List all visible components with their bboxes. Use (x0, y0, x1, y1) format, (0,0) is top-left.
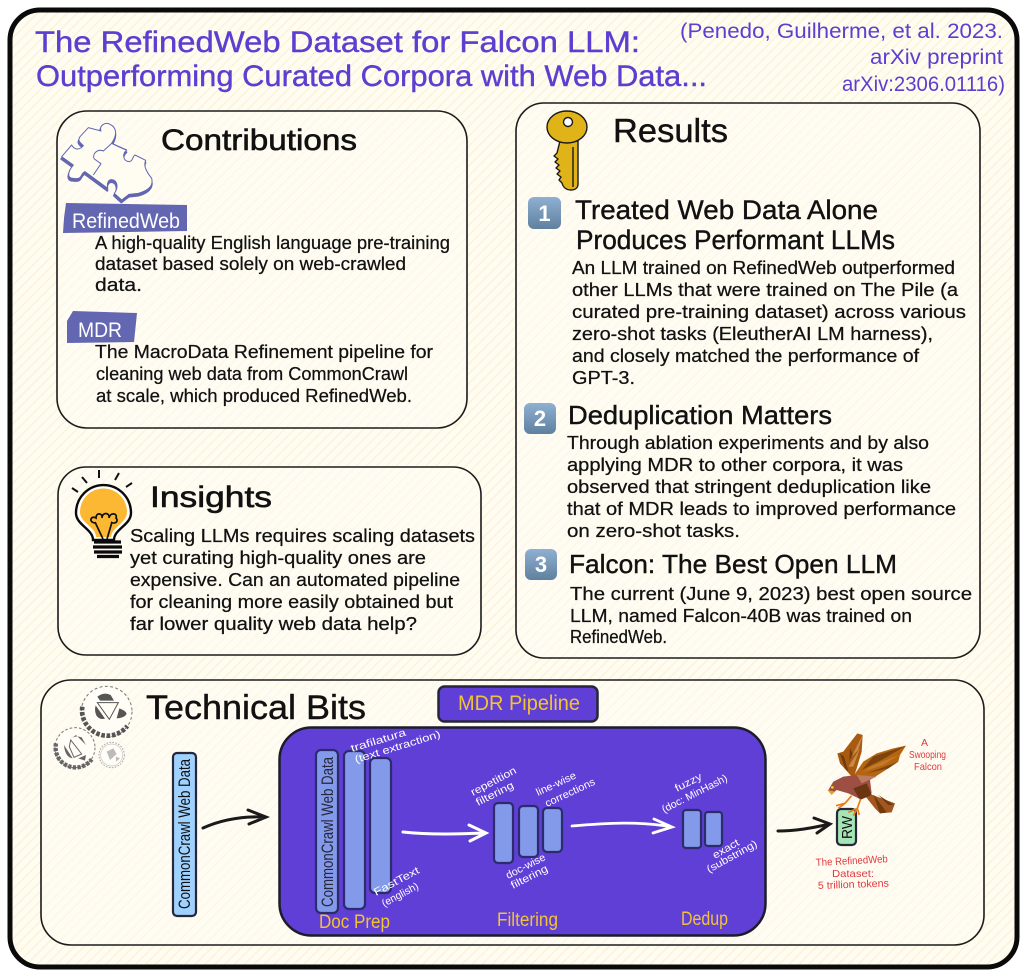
label: MDR pipeline: MDR Pipeline (458, 692, 580, 715)
badge: 1 (528, 197, 561, 229)
icon: key (547, 111, 587, 190)
text: finding 2 body: applying MDR to other corpora, it was (567, 455, 903, 475)
stage: filtering (469, 764, 597, 931)
tag: MDR: MDR (78, 319, 122, 342)
heading: finding 1: Treated Web Data Alone (575, 195, 878, 225)
panel: results (516, 103, 980, 658)
citation: arXiv preprint (870, 46, 1003, 69)
heading: technical bits: Technical Bits (146, 689, 366, 727)
panel: insights (58, 467, 481, 655)
badge: 3: 3 (535, 552, 547, 577)
icon: swooping falcon (827, 733, 906, 816)
text: finding 2 body: observed that stringent deduplication like (567, 477, 931, 497)
badge: 1: 1 (538, 201, 551, 226)
text: finding 1 body: other LLMs that were trained on The Pile (a (572, 280, 959, 300)
arrow: doc prep to filtering (403, 825, 486, 841)
text: RefinedWeb description (95, 233, 450, 295)
caption: swooping falcon: Swooping (909, 749, 946, 761)
heading: finding 1 (575, 195, 895, 255)
tag: MDR (67, 311, 137, 343)
stage: doc prep: (english) (380, 880, 421, 910)
caption: swooping falcon: A (921, 737, 928, 749)
stage: filtering: Filtering (497, 910, 558, 931)
arrow: pipeline to RefinedWeb (778, 818, 830, 833)
stage: filtering: doc-wise (504, 851, 548, 882)
arrow: filtering to dedup (572, 819, 672, 833)
text: finding 3 body: The current (June 9, 2023) best open source (570, 584, 972, 604)
panel: pipeline (280, 727, 766, 936)
text: finding 1 body: GPT-3. (572, 368, 635, 388)
stage: doc prep: CommonCrawl Web Data (318, 757, 337, 907)
title: The RefinedWeb Dataset for Falcon LLM: (35, 26, 640, 59)
label: MDR pipeline (438, 686, 598, 722)
text: finding 1 body: zero-shot tasks (EleutherAI LM harness), (572, 324, 933, 344)
caption: RefinedWeb dataset (816, 853, 889, 892)
stage: dedup: fuzzy (673, 770, 705, 795)
caption: swooping falcon (909, 737, 946, 773)
badge: 2: 2 (534, 406, 546, 431)
stage: doc prep: FastText (372, 865, 422, 899)
citation: arXiv:2306.01116) (842, 73, 1005, 96)
text: finding 2 body (567, 433, 956, 541)
text: MDR description (95, 342, 433, 406)
stage: filtering: line-wise (534, 770, 578, 799)
text: MDR description: at scale, which produced RefinedWeb. (96, 386, 412, 406)
caption: RefinedWeb dataset: Dataset: (832, 868, 874, 880)
heading: finding 2: Deduplication Matters (568, 400, 832, 430)
badge: 2 (524, 403, 556, 434)
arrow: input to pipeline (203, 810, 266, 828)
text: insights body: yet curating high-quality ones are (130, 548, 426, 568)
caption: RefinedWeb dataset: 5 trillion tokens (818, 878, 889, 892)
text: finding 2 body: that of MDR leads to improved performance (567, 499, 956, 519)
badge: 3 (525, 549, 557, 580)
box: RW dataset (837, 809, 856, 845)
text: finding 3 body (570, 584, 972, 647)
bar: CommonCrawl web data input: CommonCrawl Web Data (175, 759, 194, 909)
box: RW dataset: RW (839, 815, 856, 839)
text: RefinedWeb description: A high-quality English language pre-training (95, 233, 450, 253)
heading: insights: Insights (150, 481, 272, 514)
stage: filtering: repetition (469, 764, 519, 799)
icon: gears (55, 686, 132, 768)
citation (680, 20, 1005, 96)
stage: dedup (660, 770, 759, 930)
icon: puzzle pieces (61, 123, 152, 202)
text: finding 2 body: Through ablation experiments and by also (567, 433, 929, 453)
panel: contributions (57, 111, 467, 428)
stage: doc prep: (text extraction) (353, 728, 442, 766)
panel: technical bits (41, 680, 984, 945)
text: insights body: far lower quality web data help? (130, 614, 417, 634)
text: insights body: Scaling LLMs requires scaling datasets (130, 526, 475, 546)
title (35, 26, 707, 93)
text: finding 1 body (572, 258, 966, 388)
text: MDR description: The MacroData Refinement pipeline for (95, 342, 433, 362)
heading: results: Results (613, 112, 728, 149)
text: finding 3 body: LLM, named Falcon-40B was trained on (570, 606, 912, 626)
text: finding 1 body: An LLM trained on RefinedWeb outperformed (572, 258, 955, 278)
caption: swooping falcon: Falcon (914, 761, 942, 773)
stage: dedup: (doc: MinHash) (660, 772, 730, 816)
heading: finding 3: Falcon: The Best Open LLM (569, 549, 897, 579)
stage: dedup: exact (710, 837, 742, 862)
text: finding 2 body: on zero-shot tasks. (567, 521, 740, 541)
stage: dedup: Dedup (681, 909, 728, 930)
icon: light bulb (72, 470, 132, 556)
stage: doc prep: Doc Prep (319, 912, 390, 933)
citation: (Penedo, Guilherme, et al. 2023. (680, 20, 1003, 43)
text: RefinedWeb description: dataset based solely on web-crawled (95, 254, 406, 274)
title: Outperforming Curated Corpora with Web Data... (36, 60, 707, 93)
bar: CommonCrawl web data input (173, 753, 196, 916)
text: finding 3 body: RefinedWeb. (570, 627, 667, 647)
heading: finding 1: Produces Performant LLMs (576, 225, 895, 255)
stage: dedup: (substring) (705, 838, 759, 876)
stage: doc prep (316, 727, 442, 933)
text: RefinedWeb description: data. (95, 275, 142, 295)
text: insights body: expensive. Can an automated pipeline (130, 570, 460, 590)
text: insights body (130, 526, 475, 634)
text: insights body: for cleaning more easily obtained but (130, 592, 453, 612)
text: MDR description: cleaning web data from CommonCrawl (96, 364, 408, 384)
text: finding 1 body: and closely matched the performance of (572, 346, 920, 366)
stage: filtering: corrections (543, 776, 597, 810)
stage: doc prep: trafilatura (349, 727, 408, 755)
tag: RefinedWeb: RefinedWeb (72, 210, 180, 233)
heading: contributions: Contributions (161, 124, 357, 157)
caption: RefinedWeb dataset: The RefinedWeb (816, 853, 888, 869)
text: finding 1 body: curated pre-training dataset) across various (572, 302, 966, 322)
stage: filtering: filtering (474, 779, 516, 809)
stage: filtering: filtering (509, 863, 550, 892)
